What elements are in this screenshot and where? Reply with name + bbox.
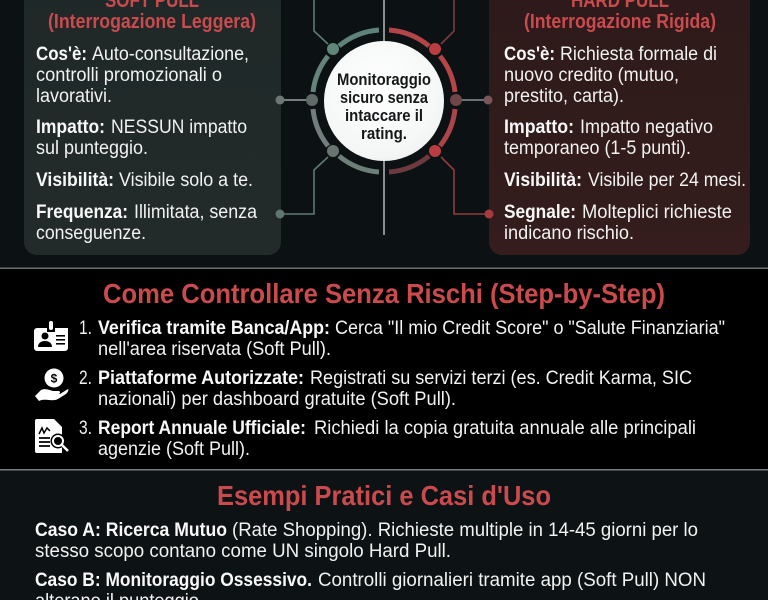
icon: hand with coin: $ [51, 372, 58, 386]
panel: hard pull [489, 0, 750, 255]
icon: hand with coin [35, 368, 68, 401]
case a: (Rate Shopping). Richieste multiple in 14-45 giorni per lo [232, 520, 698, 541]
heading: hard pull: (Interrogazione Rigida) [524, 11, 716, 33]
text: soft pull details: Auto-consultazione, [92, 44, 249, 65]
text: hard pull details: Molteplici richieste [582, 202, 732, 223]
text: hard pull details: Segnale: [504, 202, 576, 223]
text: soft pull details: lavorativi. [36, 86, 112, 107]
text: hard pull details: indicano rischio. [504, 223, 634, 244]
step 1: Verifica tramite Banca/App: [98, 318, 330, 339]
step 2: Registrati su servizi terzi (es. Credit Karma, SIC [310, 368, 692, 389]
text: soft pull details: Frequenza: [36, 202, 128, 223]
text: hard pull details: nuovo credito (mutuo, [504, 65, 679, 86]
heading: soft pull [48, 0, 256, 33]
text: hard pull details: Richiesta formale di [560, 44, 717, 65]
center callout: rating. [361, 124, 407, 143]
center callout: Monitoraggio [337, 70, 431, 89]
text: hard pull details: Visibilità: [504, 170, 582, 191]
text: soft pull details: Cos'è: [36, 44, 87, 65]
step 1: Cerca "Il mio Credit Score" o "Salute Finanziaria" [335, 318, 725, 339]
case a [35, 520, 698, 562]
case b [35, 570, 706, 600]
step 3 [79, 418, 696, 460]
step 1 [79, 318, 725, 360]
text: soft pull details: Impatto: [36, 117, 105, 138]
step 2: Piattaforme Autorizzate: [98, 368, 304, 389]
step 3: 3. [79, 418, 92, 439]
panel: soft pull [24, 0, 281, 255]
step 2: 2. [79, 368, 92, 389]
icon: report with magnifier [35, 419, 68, 453]
case a: stesso scopo contano come UN singolo Hard Pull. [35, 541, 451, 562]
heading: how to check: Come Controllare Senza Rischi (Step-by-Step) [103, 278, 665, 309]
step 1: 1. [79, 318, 92, 339]
step 3: agenzie (Soft Pull). [98, 439, 250, 460]
text: hard pull details [504, 44, 746, 244]
text: soft pull details: sul punteggio. [36, 138, 148, 159]
text: soft pull details: conseguenze. [36, 223, 146, 244]
text: soft pull details: Illimitata, senza [134, 202, 257, 223]
text: hard pull details: temporaneo (1-5 punti). [504, 138, 691, 159]
panel: practical examples [0, 470, 768, 600]
heading: hard pull [524, 0, 716, 33]
step 1: nell'area riservata (Soft Pull). [98, 339, 331, 360]
panel: how to check [0, 268, 768, 470]
case a: Caso A: Ricerca Mutuo [35, 520, 227, 541]
center callout: sicuro senza [340, 88, 428, 107]
step 3: Report Annuale Ufficiale: [98, 418, 306, 439]
central connector diagram [276, 0, 494, 235]
step 2: nazionali) per dashboard gratuite (Soft Pull). [98, 389, 456, 410]
text: soft pull details: Visibilità: [36, 170, 114, 191]
text: hard pull details: Visibile per 24 mesi. [588, 170, 746, 191]
case b: Caso B: Monitoraggio Ossessivo. [35, 570, 312, 591]
text: hard pull details: prestito, carta). [504, 86, 624, 107]
case b: Controlli giornalieri tramite app (Soft Pull) NON [318, 570, 706, 591]
text: soft pull details: controlli promozionali o [36, 65, 222, 86]
center callout: intaccare il [345, 106, 423, 125]
text: hard pull details: Impatto negativo [580, 117, 713, 138]
icon: id card [34, 321, 68, 351]
text: soft pull details: Visibile solo a te. [119, 170, 253, 191]
heading: practical examples: Esempi Pratici e Casi d'Uso [217, 480, 551, 511]
text: hard pull details: Cos'è: [504, 44, 555, 65]
text: soft pull details: NESSUN impatto [111, 117, 247, 138]
text: hard pull details: Impatto: [504, 117, 574, 138]
step 2 [79, 368, 692, 410]
heading: soft pull: (Interrogazione Leggera) [48, 11, 256, 33]
center callout [324, 41, 444, 161]
text: soft pull details [36, 44, 257, 244]
step 3: Richiedi la copia gratuita annuale alle principali [314, 418, 696, 439]
